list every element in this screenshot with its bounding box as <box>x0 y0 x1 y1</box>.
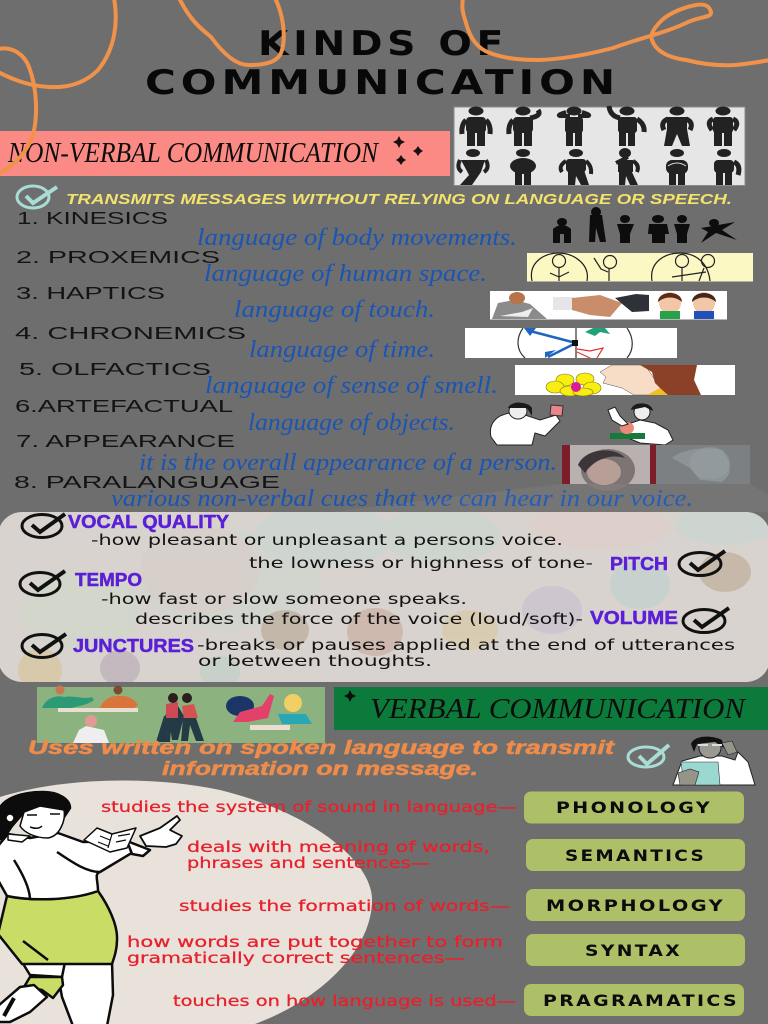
text: junctures: or between thoughts. <box>198 652 432 670</box>
definition: semantics: deals with meaning of words, <box>187 838 490 856</box>
icon: grid of body posture figures <box>454 106 745 186</box>
image: haptics photos <box>490 291 727 320</box>
illustration: woman with book <box>0 792 182 1024</box>
list: blue definitions: various non-verbal cues that we can hear in our voice. <box>111 486 693 512</box>
button: morphology: MORPHOLOGY <box>546 896 725 915</box>
list: blue definitions: language of sense of smell. <box>205 373 498 399</box>
icon: teal check <box>628 745 669 767</box>
button: syntax: SYNTAX <box>585 941 682 960</box>
text: volume: VOLUME <box>590 608 678 628</box>
decorative orange curves <box>0 0 768 174</box>
definition: syntax: gramatically correct sentences— <box>127 949 465 967</box>
button: phonology <box>524 792 744 824</box>
button: syntax <box>526 934 745 966</box>
text: vocal quality <box>22 512 563 549</box>
text: junctures <box>22 634 735 670</box>
image: communication tips illustration <box>37 686 325 743</box>
text: pitch: PITCH <box>610 554 668 574</box>
definition: semantics <box>187 838 490 872</box>
list: blue definitions: language of objects. <box>248 410 455 436</box>
check icon and tagline: TRANSMITS MESSAGES WITHOUT RELYING ON LANGUAGE OR SPEECH. <box>66 191 732 208</box>
panel: verbal heading bar: VERBAL COMMUNICATION <box>370 694 746 725</box>
button: semantics: SEMANTICS <box>565 846 706 865</box>
button: pragramatics <box>524 984 744 1016</box>
text: junctures: -breaks or pauses applied at the end of utterances <box>197 636 735 654</box>
panel: cream ellipse <box>0 780 372 1024</box>
image: chronemics clock <box>465 328 677 358</box>
panel: verbal heading bar <box>334 687 768 730</box>
title <box>145 24 620 103</box>
list: non-verbal kinds: 2. PROXEMICS <box>16 247 220 267</box>
text: verbal definition <box>28 738 615 780</box>
definition: syntax <box>127 933 503 967</box>
list: blue definitions: language of time. <box>249 337 435 363</box>
list: blue definitions: language of human space. <box>204 261 487 287</box>
definition: pragmatics: touches on how language is used— <box>173 992 516 1010</box>
text: volume <box>135 608 729 632</box>
text: pitch: the lowness or highness of tone- <box>249 554 593 572</box>
list: non-verbal kinds: 7. APPEARANCE <box>16 431 235 451</box>
button: morphology <box>526 889 745 921</box>
icon: kinesics figures <box>553 207 737 243</box>
button: phonology: PHONOLOGY <box>556 798 712 817</box>
icon: man with clipboard <box>673 737 755 785</box>
list: non-verbal kinds: 5. OLFACTICS <box>19 359 211 379</box>
text: vocal quality: VOCAL QUALITY <box>68 512 229 532</box>
image: appearance portrait photos <box>562 445 750 491</box>
list: non-verbal kinds: 1. KINESICS <box>17 208 168 228</box>
list: non-verbal kinds: 3. HAPTICS <box>16 283 165 303</box>
list: non-verbal kinds: 8. PARALANGUAGE <box>14 472 280 492</box>
list: blue definitions: language of touch. <box>234 297 435 323</box>
panel: paralanguage qualities <box>0 512 768 682</box>
check icon and tagline <box>17 186 732 208</box>
list: blue definitions: it is the overall appearance of a person. <box>139 450 557 476</box>
text: tempo: -how fast or slow someone speaks. <box>101 590 467 608</box>
definition: phonology: studies the system of sound in language— <box>101 798 517 816</box>
text: tempo <box>20 570 467 608</box>
list: blue definitions <box>111 225 693 512</box>
title: COMMUNICATION <box>145 63 620 103</box>
text: vocal quality: -how pleasant or unpleasant a persons voice. <box>91 531 563 549</box>
panel: non-verbal heading bar: NON-VERBAL COMMUNICATION <box>7 138 379 169</box>
list: non-verbal kinds: 6.ARTEFACTUAL <box>15 396 233 416</box>
text: volume: describes the force of the voice (loud/soft)- <box>135 610 583 628</box>
panel: non-verbal heading bar <box>0 131 450 176</box>
definition: syntax: how words are put together to form <box>127 933 503 951</box>
text: pitch <box>249 551 725 576</box>
icon: artefactual figures <box>490 403 673 445</box>
text: junctures: JUNCTURES <box>73 636 194 656</box>
list: non-verbal kinds: 4. CHRONEMICS <box>15 323 246 343</box>
image: proxemics cartoon <box>527 253 753 282</box>
text: tempo: TEMPO <box>75 570 142 590</box>
text: verbal definition: information on message. <box>162 759 478 780</box>
text: verbal definition: Uses written on spoken language to transmit <box>28 738 615 759</box>
title: KINDS OF <box>258 24 508 64</box>
list: non-verbal kinds <box>14 208 280 492</box>
definition: semantics: phrases and sentences— <box>187 854 430 872</box>
image: olfactics flower and face <box>515 365 735 396</box>
faint light wedge above panel <box>330 484 768 512</box>
list: blue definitions: language of body movements. <box>197 225 517 251</box>
button: pragramatics: PRAGRAMATICS <box>543 991 739 1010</box>
button: semantics <box>526 839 745 871</box>
definition: morphology: studies the formation of words— <box>179 897 510 915</box>
